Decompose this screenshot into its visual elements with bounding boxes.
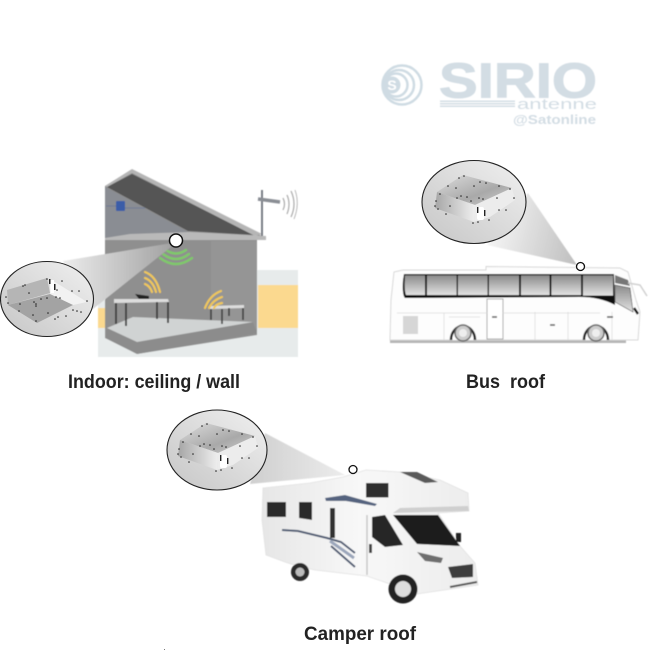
rear wheel <box>584 325 608 341</box>
floor front <box>107 322 257 354</box>
cab side window <box>372 515 403 547</box>
camper body <box>262 470 478 594</box>
camper door <box>330 508 335 538</box>
label: indoor: Indoor: ceiling / wall <box>68 372 240 393</box>
ground backdrop <box>98 270 298 357</box>
logo lines <box>440 100 515 107</box>
alcove window <box>366 483 388 498</box>
callout cone: bus <box>487 193 577 265</box>
attic wall <box>105 187 188 238</box>
house wall <box>105 170 262 354</box>
logo wordmark: SIRIO <box>439 54 597 108</box>
panel: bus <box>390 266 647 343</box>
logo emblem <box>382 66 422 104</box>
logo subtitle: antenne <box>517 96 597 113</box>
router on table <box>135 294 149 299</box>
headlight <box>417 552 443 563</box>
panel: indoor building <box>98 169 298 357</box>
callout cone: camper <box>250 433 345 484</box>
bumper <box>450 582 477 587</box>
signal waves yellow 2 <box>205 291 222 308</box>
marker: bus <box>576 262 584 270</box>
wifi device cable <box>106 206 145 208</box>
ceiling slab <box>105 232 266 240</box>
windshield <box>615 285 633 312</box>
yellow wall right <box>258 285 298 328</box>
alcove shading <box>393 506 469 513</box>
bus mirror <box>628 283 647 296</box>
yellow wall left <box>98 308 106 328</box>
antenna on roof <box>258 190 280 236</box>
rear wheel <box>291 563 309 581</box>
table left <box>114 299 169 326</box>
stripes lower <box>282 530 355 567</box>
door handle <box>369 544 372 553</box>
callout: camper device <box>167 410 267 490</box>
callout cone: indoor <box>63 243 172 309</box>
roof slope <box>107 174 254 235</box>
wifi device <box>116 201 125 211</box>
marker: indoor <box>170 234 182 247</box>
label: bus: Bus roof <box>466 372 546 393</box>
callout: bus device <box>422 160 526 244</box>
roof edge <box>105 169 262 236</box>
right room <box>211 241 257 329</box>
panel: camper <box>262 470 478 604</box>
mirror <box>456 533 461 542</box>
bus markers <box>492 317 613 325</box>
cab seam <box>366 515 368 575</box>
side window 2 <box>299 502 312 520</box>
bus door <box>487 299 503 339</box>
antenna waves <box>283 190 297 219</box>
camper roof vent <box>400 472 438 483</box>
windshield <box>393 515 460 546</box>
front wheel <box>388 574 418 604</box>
label: camper: Camper roof <box>304 624 417 645</box>
watermark: @Satonline <box>513 112 596 127</box>
callout: indoor device <box>0 262 94 336</box>
bus body <box>390 266 640 340</box>
marker: camper <box>349 466 357 474</box>
stripes upper <box>325 495 377 506</box>
side window 1 <box>267 502 286 517</box>
stray dot <box>164 649 165 650</box>
table right <box>210 305 244 324</box>
bus shadow <box>390 340 626 343</box>
bus panels <box>397 312 612 340</box>
grille <box>448 564 473 578</box>
front wheel <box>451 325 475 341</box>
floor top <box>107 317 253 342</box>
signal waves yellow 1 <box>145 272 160 292</box>
bus side hatch <box>403 316 418 334</box>
windshield top <box>615 275 630 286</box>
window band <box>403 274 615 305</box>
signal waves green <box>160 250 192 264</box>
logo emblem: S <box>387 77 397 93</box>
bus front edge <box>634 308 638 314</box>
logo: Sirio antenne <box>382 54 597 127</box>
bus side windows <box>405 276 613 296</box>
